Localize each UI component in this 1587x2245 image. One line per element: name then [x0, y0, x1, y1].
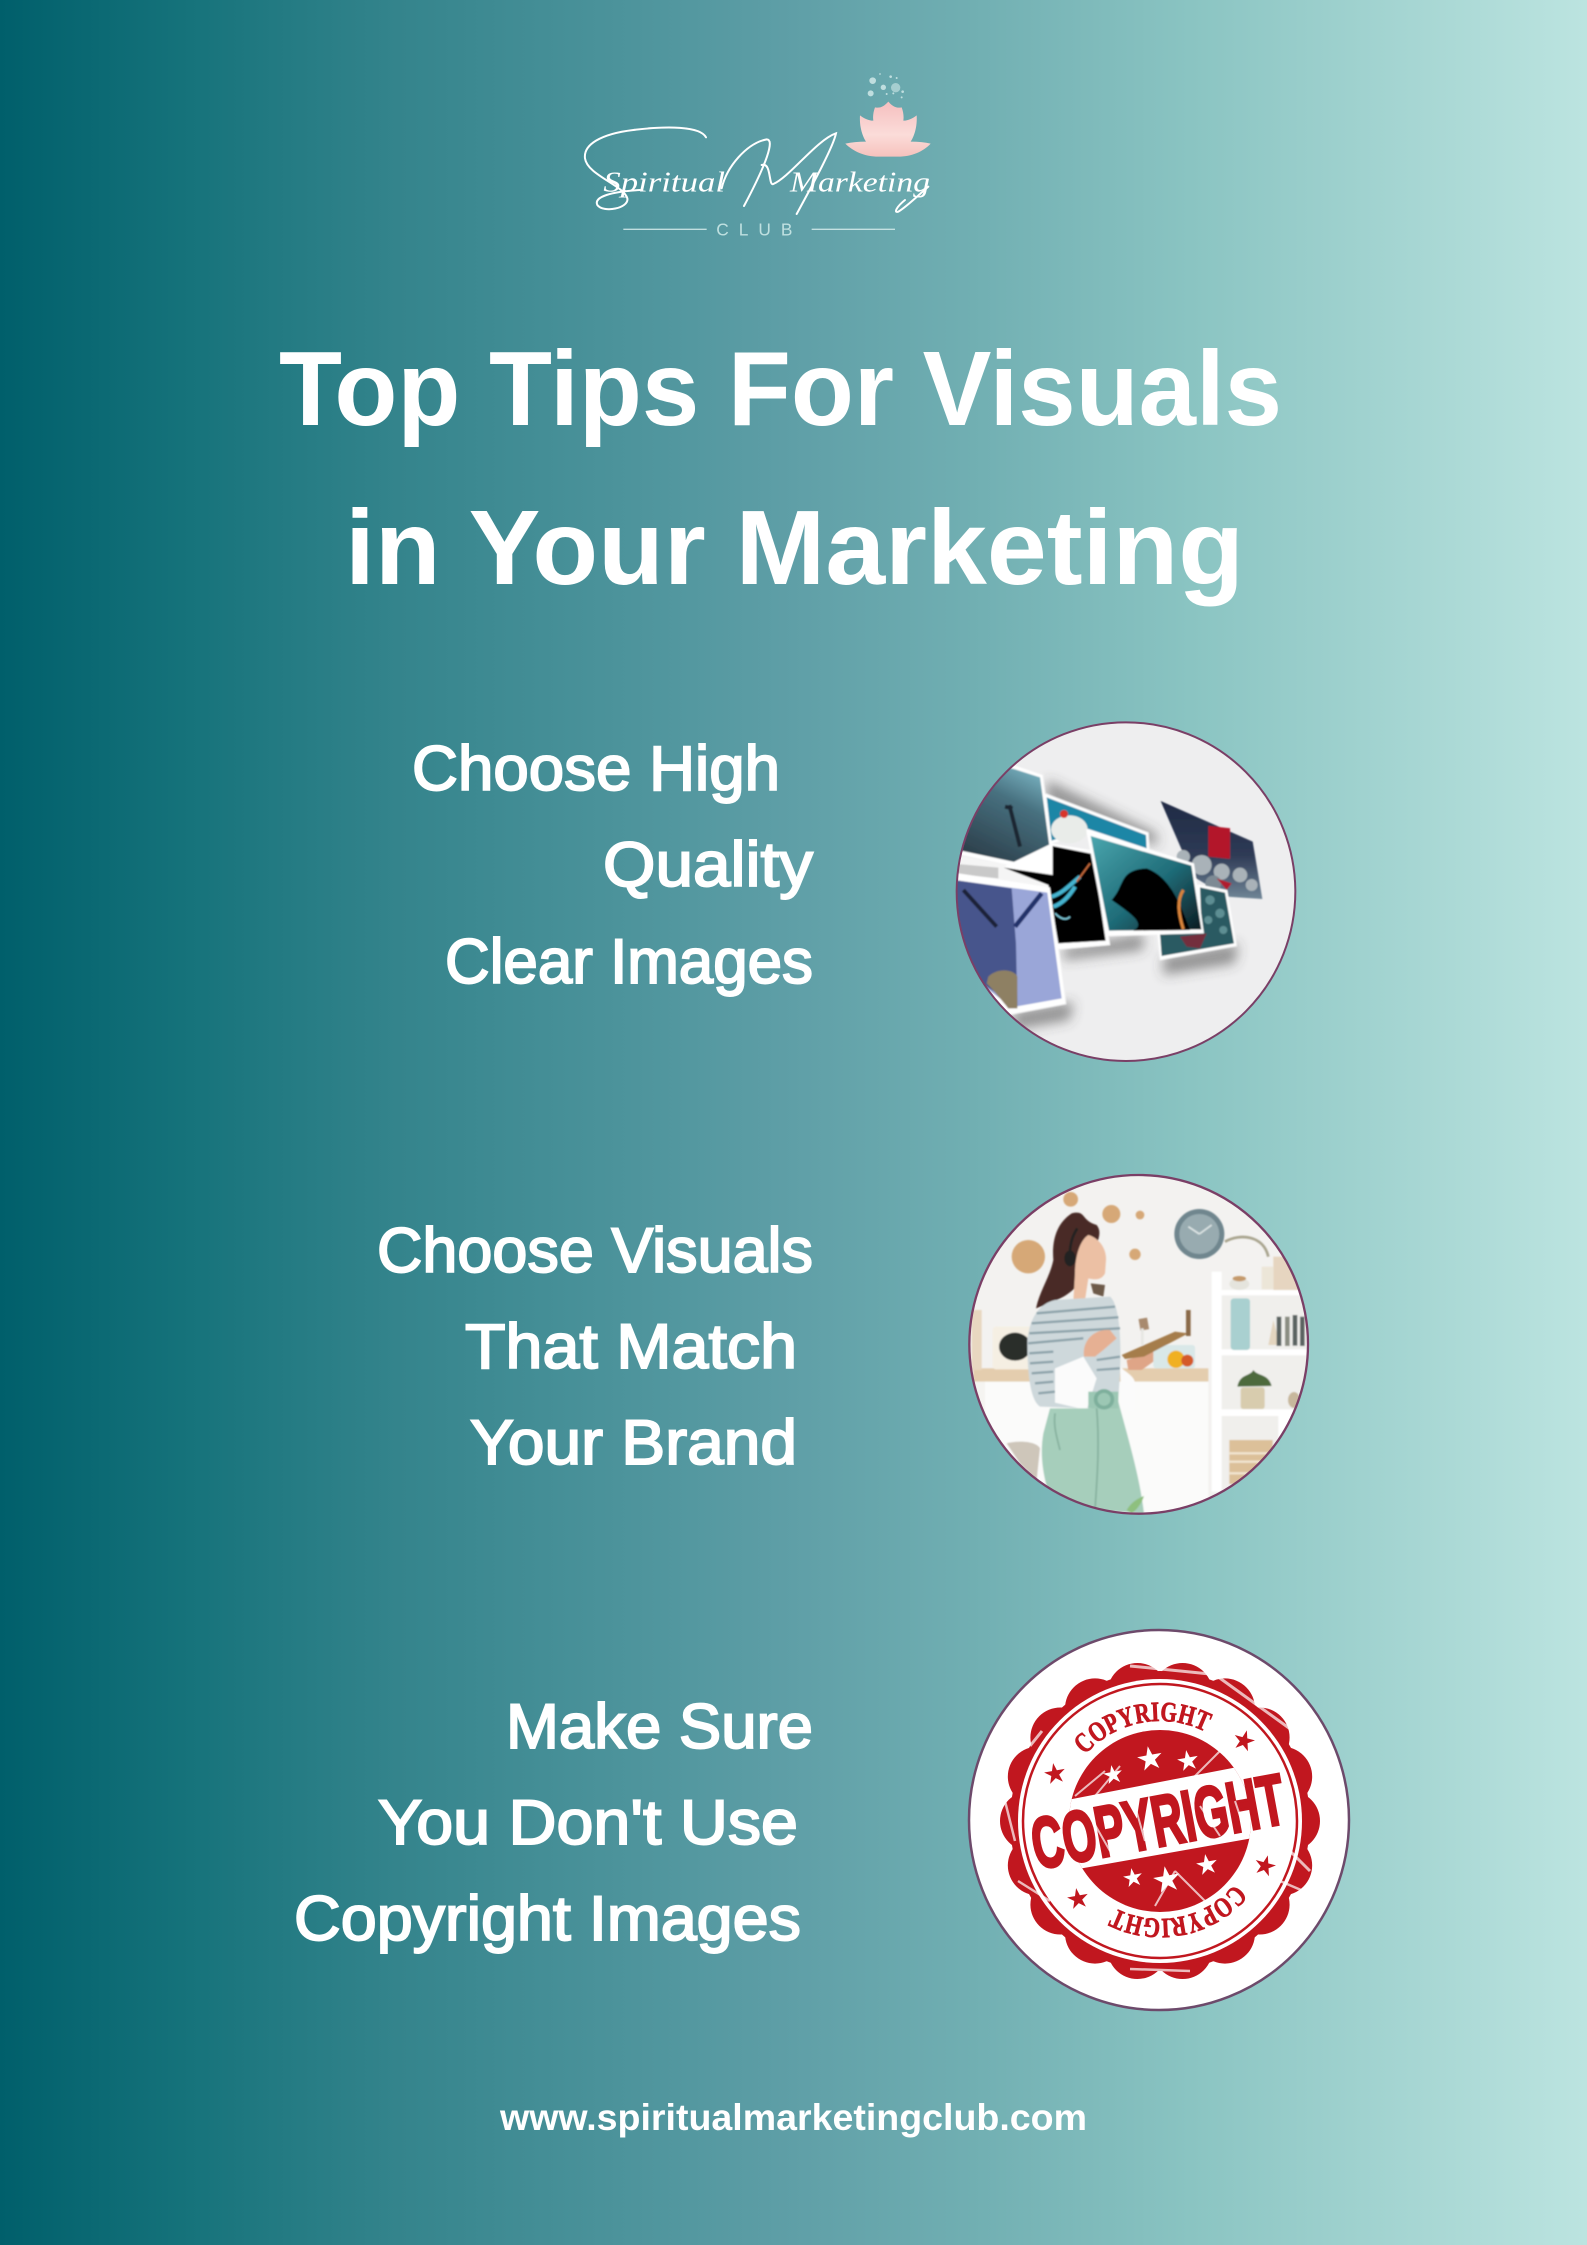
white banner: [1010, 1753, 1310, 1881]
tip 1 text: [412, 734, 814, 997]
tip 1 text: Quality: [603, 830, 814, 900]
red stars: [1043, 1728, 1278, 1910]
white stars: [1102, 1744, 1219, 1893]
tip 1 text: Choose High: [412, 734, 780, 804]
photo shadows: [1013, 780, 1238, 1030]
tip 3 text: Make Sure: [506, 1692, 813, 1762]
countertop items: [1139, 1318, 1149, 1331]
kitchen counter: [973, 1368, 1208, 1382]
website url: www.spiritualmarketingclub.com: [499, 2097, 1087, 2138]
shelf unit: [1273, 1257, 1313, 1290]
tip 3 image: copyright stamp: [968, 1628, 1350, 2012]
cork wall dots: [1012, 1192, 1144, 1273]
woman: green trousers: [1042, 1402, 1144, 1513]
woman: hands and book: [1084, 1330, 1117, 1357]
stamp inner rings: [1018, 1679, 1302, 1963]
title: Top Tips For Visuals: [279, 330, 1282, 448]
icon: lotus flower: [845, 102, 931, 157]
tip 2 image: woman with headset and book in kitchen: [969, 1175, 1313, 1515]
tip 3 text: You Don't Use: [378, 1788, 798, 1858]
photo top left: [930, 743, 1056, 875]
woman: hair: [1036, 1213, 1099, 1308]
icon: sparkle dots: [868, 73, 904, 98]
logo: Spiritual Marketing Club: [585, 73, 931, 239]
photo grey strip: [1004, 869, 1031, 878]
logo: Spiritual Marketing Club: Marketing: [789, 168, 930, 199]
distress scratches: [1005, 1666, 1310, 1971]
tip 3 text: [294, 1692, 813, 1954]
tip 2 text: [377, 1216, 813, 1478]
tip 1 image: floating photo collage: [930, 722, 1295, 1061]
stool: [1007, 1442, 1040, 1480]
logo wordmark: Spiritual: [603, 168, 725, 199]
tip 2 text: That Match: [465, 1312, 797, 1382]
belt ring: [1088, 1392, 1118, 1408]
banner word: COPYRIGHT: [1025, 1760, 1291, 1885]
wall clock: [1174, 1209, 1224, 1259]
tip 1 text: Clear Images: [445, 927, 813, 997]
photo lower right: [1157, 884, 1237, 960]
arc text: [1075, 1702, 1246, 1938]
microwave: [993, 1327, 1034, 1369]
central disc: [1069, 1730, 1251, 1912]
icon: script flourishes: [585, 128, 928, 214]
tip 3 text: Copyright Images: [294, 1884, 801, 1954]
arc text: COPYRIGHT: [1075, 1702, 1213, 1752]
scalloped stamp edge: [1010, 1671, 1310, 1971]
photo black: [1004, 843, 1110, 949]
arc text: COPYRIGHT: [1108, 1887, 1246, 1938]
tip 2 text: Your Brand: [470, 1408, 797, 1478]
woman: face: [1073, 1235, 1106, 1302]
tip 2 text: Choose Visuals: [377, 1216, 813, 1286]
woman: striped sweater: [1027, 1297, 1120, 1408]
photo lower left: [950, 872, 1066, 1015]
title: in Your Marketing: [345, 489, 1244, 607]
photo blue sphere: [1045, 793, 1149, 850]
photo centre: [1086, 829, 1204, 936]
photo top right: [1161, 801, 1262, 899]
logo sub-line CLUB: CLUB: [716, 219, 802, 239]
potted plant: [1237, 1370, 1272, 1387]
title: [279, 330, 1282, 607]
wooden crate: [1229, 1440, 1273, 1484]
woman: cuffs: [1055, 1357, 1097, 1410]
